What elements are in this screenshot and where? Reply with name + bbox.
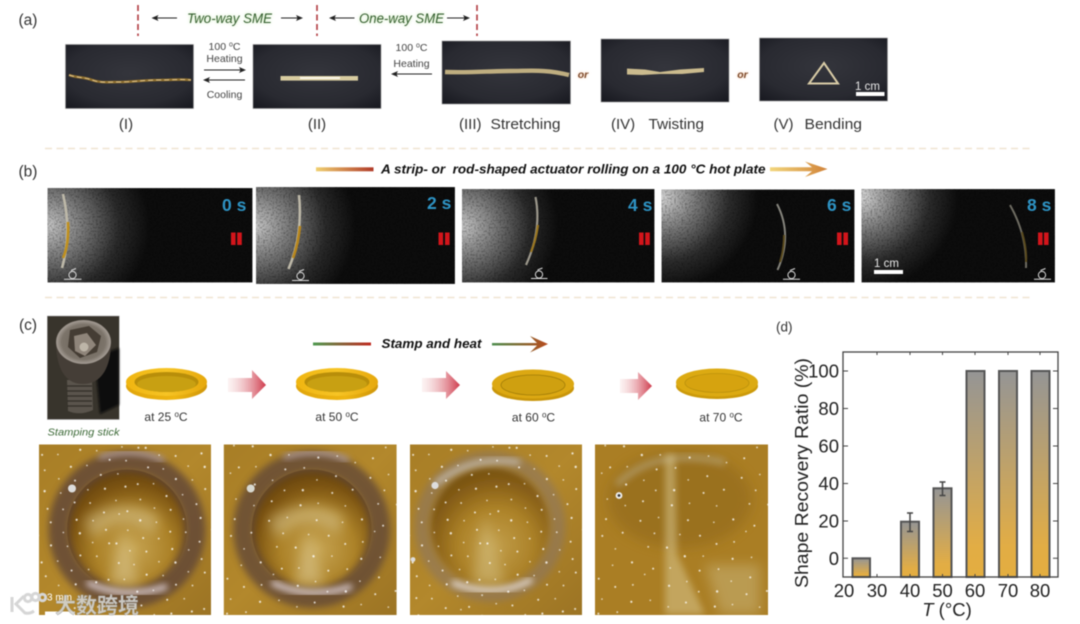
watermark logo and text <box>12 593 139 618</box>
x-axis tick labels: 60 <box>965 580 985 601</box>
photo: 6 s <box>662 190 854 282</box>
label at 50 C: at 50 <box>315 410 342 424</box>
heating and cooling arrows I-II: Heating <box>206 53 243 65</box>
photo III: stretched strip <box>442 41 570 104</box>
panel label (c): (c) <box>19 317 37 334</box>
heating and cooling arrows I-II: C <box>233 41 241 53</box>
label at 60 C: C <box>546 410 555 424</box>
panel: (b) actuator rolling sequence <box>18 162 1055 284</box>
label at 70 C: o <box>729 410 734 420</box>
panel label (d): (d) <box>776 320 792 334</box>
x-axis tick labels: 40 <box>900 580 920 601</box>
rolling sequence heading with arrow: A strip- or rod-shaped actuator rolling on a 100 °C hot plate <box>380 162 766 176</box>
photo V: bent triangle and 1 cm scale: 1 cm <box>855 81 880 93</box>
photo: stamping stick bolt <box>47 316 119 420</box>
panel label (a): (a) <box>18 12 37 29</box>
disc at 60 C: shallow imprint <box>492 370 574 401</box>
arrow <box>620 372 652 400</box>
arrow <box>422 371 460 399</box>
stage captions: (V) <box>774 116 794 133</box>
photo V: bent triangle and 1 cm scale <box>760 38 888 101</box>
x-axis title: T (°C) <box>922 599 972 620</box>
rolling sequence heading with arrow <box>316 162 828 177</box>
photo: 8 s with 1 cm scale <box>862 189 1055 282</box>
stamp and heat heading with arrow: Stamp and heat <box>382 336 482 351</box>
photo: 2 s: 2 s <box>427 193 452 213</box>
y-axis tick labels: 80 <box>818 398 839 419</box>
heating arrow III-II: o <box>416 42 420 50</box>
y-axis tick labels: 0 <box>829 548 839 569</box>
stage captions <box>119 116 862 133</box>
y-axis tick labels: 60 <box>818 436 839 456</box>
photo: 0 s: 0 s <box>222 195 247 215</box>
y-axis title: Shape Recovery Ratio (%) <box>791 358 812 588</box>
y-axis tick labels: 100 <box>808 360 839 382</box>
micrograph: 25 C <box>38 444 212 616</box>
one-way SME heading: One-way SME <box>359 11 445 26</box>
label at 50 C: o <box>345 410 350 419</box>
or: or <box>737 69 749 81</box>
label at 25 C: o <box>174 410 179 419</box>
two-way and one-way boundary markers <box>138 5 477 36</box>
photo: 2 s <box>256 187 455 284</box>
one-way SME heading <box>330 11 469 26</box>
micrograph: 50 C <box>223 444 398 616</box>
arrow <box>228 370 266 399</box>
two-way SME heading: Two-way SME <box>187 11 273 26</box>
x-axis tick labels: 20 <box>834 580 854 601</box>
heating and cooling arrows I-II: o <box>229 42 233 48</box>
disc at 25 C: deep imprint <box>126 368 207 400</box>
panel label (b): (b) <box>18 164 37 180</box>
heating and cooling arrows I-II <box>204 41 245 101</box>
y-axis tick labels <box>808 360 839 569</box>
disc at 70 C: recovered flat <box>676 368 758 399</box>
heating and cooling arrows I-II: Cooling <box>207 89 242 101</box>
label at 25 C: C <box>179 410 188 424</box>
photo: 4 s <box>462 189 654 282</box>
x-axis tick labels: 30 <box>867 580 887 601</box>
stage captions: Twisting <box>648 116 704 133</box>
stage captions: Bending <box>804 116 862 133</box>
stage captions: (III) <box>459 116 482 133</box>
heating arrow III-II: C <box>420 42 428 54</box>
photo IV: twisted strip <box>601 39 729 102</box>
micrograph: 60 C <box>409 444 583 616</box>
disc at 50 C <box>296 368 378 400</box>
heating arrow III-II: 100 <box>396 42 413 54</box>
or: or <box>578 69 589 81</box>
heating and cooling arrows I-II: 100 <box>209 41 226 53</box>
photo: 0 s <box>48 188 252 282</box>
x-axis tick labels: 50 <box>932 580 953 601</box>
label at 50 C: C <box>350 410 359 424</box>
label at 60 C: at 60 <box>512 410 539 424</box>
x-axis tick labels <box>834 580 1050 601</box>
bars <box>852 371 1050 577</box>
photo: 8 s with 1 cm scale: 8 s <box>1027 195 1052 215</box>
photo: 6 s: 6 s <box>827 195 852 215</box>
plot frame and ticks <box>843 352 1058 577</box>
x-axis tick labels: 70 <box>998 580 1018 601</box>
y-axis tick labels: 40 <box>818 473 839 494</box>
stage captions: Stretching <box>490 116 560 133</box>
y-axis tick labels: 20 <box>818 510 839 532</box>
micrograph: 25 C: 3 mm <box>47 592 72 604</box>
stage captions: (I) <box>119 116 133 133</box>
stamp and heat heading with arrow <box>313 336 548 352</box>
label at 70 C: C <box>734 410 743 424</box>
stage captions: (II) <box>308 116 326 133</box>
micrograph: 70 C recovered <box>594 444 769 616</box>
photo: 4 s: 4 s <box>628 195 653 215</box>
panel: (c) stamping and heat recovery <box>19 316 768 615</box>
panel: (d) shape recovery bar chart <box>776 320 1058 620</box>
caption: stamping stick: Stamping stick <box>48 426 120 438</box>
photo I: wavy strip <box>66 44 194 108</box>
heating arrow III-II: Heating <box>393 58 430 70</box>
error bars <box>907 482 946 532</box>
photo II: straight strip <box>253 44 381 108</box>
watermark logo and text: 大数跨境 <box>55 595 139 618</box>
label at 60 C: o <box>542 410 547 420</box>
stage captions: (IV) <box>611 116 635 133</box>
panel: (a) shape memory stages <box>18 5 888 133</box>
label at 25 C: at 25 <box>144 410 171 424</box>
label at 70 C: at 70 <box>699 410 726 424</box>
photo: 8 s with 1 cm scale: 1 cm <box>874 258 899 270</box>
heating arrow III-II <box>392 42 432 74</box>
x-axis tick labels: 80 <box>1030 580 1050 601</box>
